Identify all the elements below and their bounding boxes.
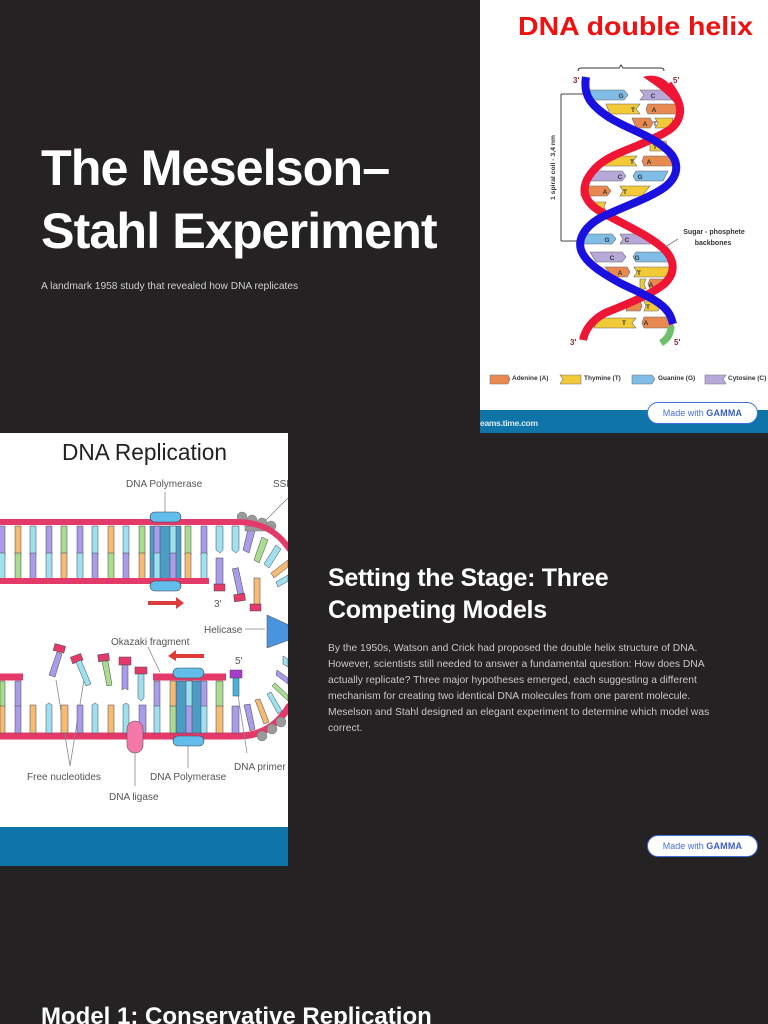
labels: 5' [235,656,243,667]
diagram title: DNA Replication [62,439,227,465]
SSB proteins bottom [257,717,286,741]
watermark: eams.time.com [480,418,538,428]
base letters: T [653,121,657,128]
base letters: G [618,93,624,100]
spiral measure [550,94,590,241]
blue strand [580,77,676,324]
green end [661,326,671,343]
footer band [480,410,768,433]
section heading: Competing Models [328,596,547,624]
DNA ligase [127,721,143,753]
labels: Free nucleotides [27,772,101,783]
labels: DNA Polymerase [126,479,203,490]
badge: Made with Gamma, top [647,402,758,424]
backbone callout [665,229,745,247]
base letters: G [634,255,640,262]
title: Stahl Experiment [41,202,437,259]
section body text: However, scientists still needed to answer a fundamental question: How does DNA [328,659,705,670]
section body text: correct. [328,723,362,734]
leader lines [56,492,288,786]
strand end labels: 5' [674,338,680,347]
base letters: A [643,121,648,128]
footer band [0,827,288,866]
legend [490,375,766,384]
base letters: C [618,174,623,181]
free nucleotides upper [214,558,289,648]
base letters: G [604,237,610,244]
section body text: By the 1950s, Watson and Crick had proposed the double helix structure of DNA. [328,643,697,654]
strand end labels: 5' [673,76,679,85]
image: DNA replication diagram [0,433,288,866]
backbone callout: backbones [695,240,731,247]
image: DNA double helix diagram [480,0,768,433]
base letters [603,93,657,327]
subtitle: A landmark 1958 study that revealed how DNA replicates [41,281,298,292]
top rungs [0,526,288,587]
labels: DNA primer [234,762,286,773]
image heading: DNA double helix [518,11,754,41]
brace [578,65,664,71]
lower rungs [0,656,288,733]
base letters: A [649,282,654,289]
base letters: T [622,320,626,327]
base letters: T [653,144,657,151]
base letters: A [647,159,652,166]
base letters: A [618,270,623,277]
labels [27,479,293,803]
labels: DNA Polymerase [150,772,227,783]
base letters: T [637,270,641,277]
base letters: A [603,189,608,196]
base letters: C [651,93,656,100]
section heading [328,564,608,624]
base letters: A [652,107,657,114]
SSB proteins top [237,512,276,531]
base letters: T [623,189,627,196]
section body text: Meselson and Stahl designed an elegant experiment to determine which model was [328,707,709,718]
base letters: T [630,159,634,166]
red strand [583,76,680,340]
base letters: C [625,237,630,244]
legend: Thymine (T) [584,375,621,382]
direction arrows [148,597,204,661]
spiral measure: 1 spiral coil - 3,4 nm [550,135,557,200]
base letters: G [637,174,643,181]
strand end labels [570,76,680,347]
base letters: T [646,304,650,311]
title [41,139,437,259]
legend: Guanine (G) [658,375,695,382]
polymerase proteins top [150,512,204,746]
badge: Made with Gamma, top: Made with GAMMA [663,408,742,418]
base pairs [580,90,679,328]
base letters: C [610,255,615,262]
section body text: actually replicate? Three major hypotheses emerged, each suggesting a different [328,675,697,686]
labels: Helicase [204,625,243,636]
backbone callout: Sugar - phosphete [683,229,745,236]
section body text: mechanism for creating two identical DNA molecules from one parent molecule. [328,691,690,702]
legend: Cytosine (C) [728,375,766,382]
backbone strands [0,522,290,581]
legend: Adenine (A) [512,375,548,382]
badge: Made with Gamma, middle [647,835,758,857]
free nucleotides lower [49,644,242,701]
labels: Okazaki fragment [111,637,190,648]
strand end labels: 3' [570,338,576,347]
base letters: T [631,107,635,114]
title: The Meselson– [41,139,389,196]
base letters: A [644,320,649,327]
labels: 3' [214,599,222,610]
labels: DNA ligase [109,792,159,803]
strand end labels: 3' [573,76,579,85]
badge: Made with Gamma, middle: Made with GAMMA [663,841,742,851]
section body text [328,643,709,734]
section heading: Setting the Stage: Three [328,564,608,592]
